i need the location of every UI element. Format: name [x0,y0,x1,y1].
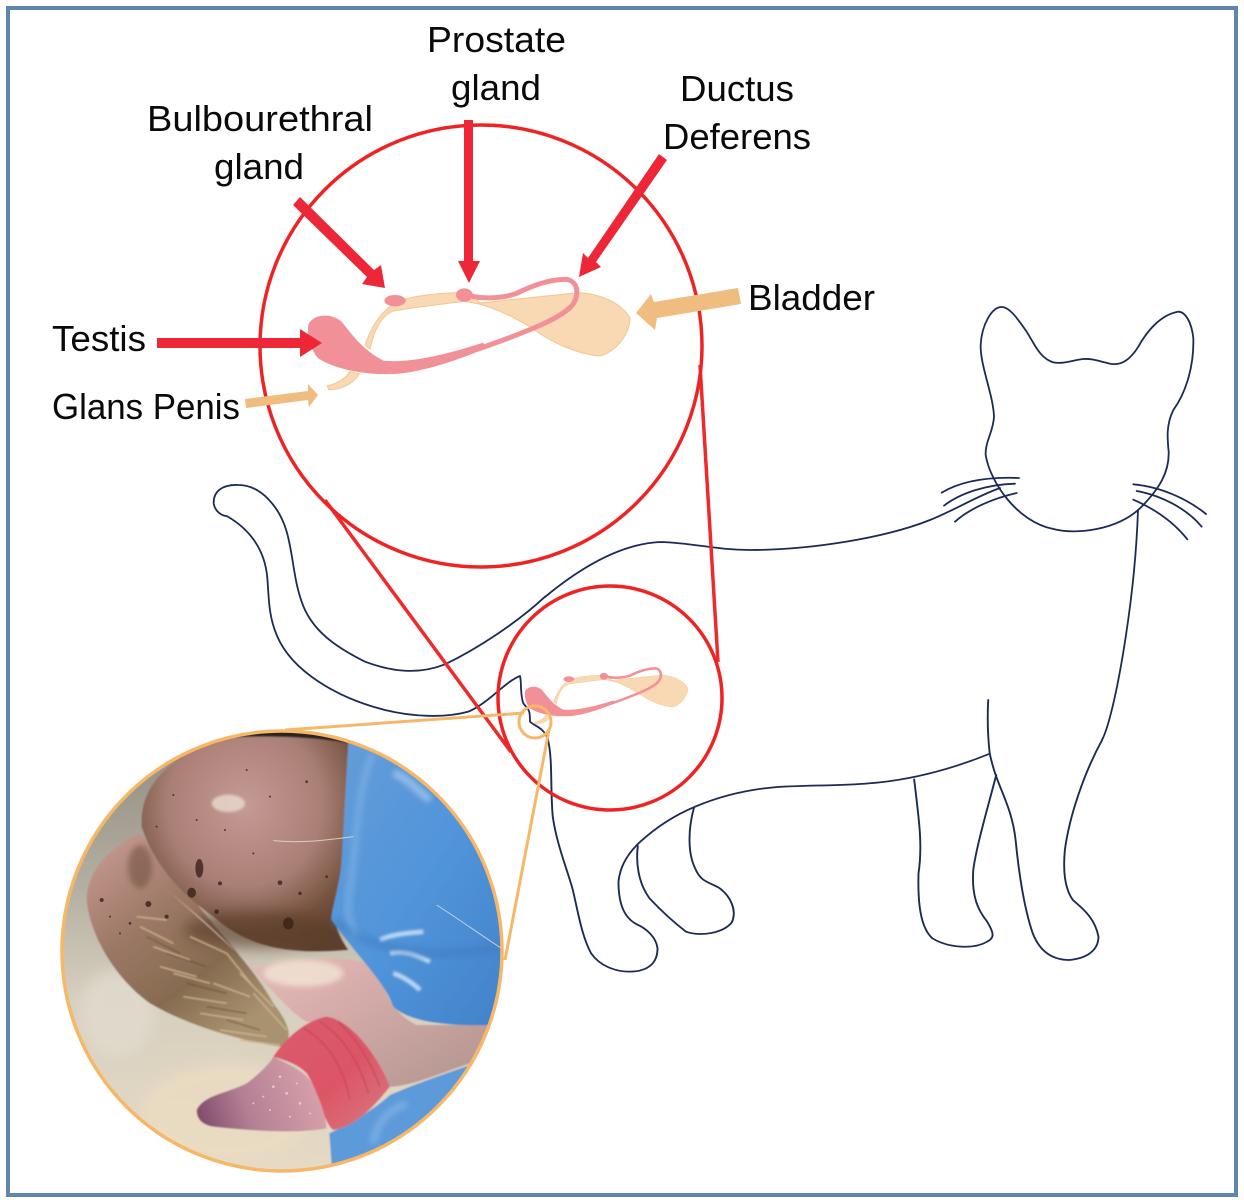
arrow: ductus deferens [579,154,667,277]
blue glove upper [330,743,500,1026]
small magnifier: anatomy [525,668,688,724]
dark skin specks [100,769,328,934]
label: Prostate gland: gland [451,67,541,108]
arrow: bulbourethral gland [293,197,385,288]
label: Bulbourethral gland: Bulbourethral [147,98,373,139]
photo callout connector [285,706,551,960]
arrow: bladder [636,288,741,330]
glans [197,1057,327,1131]
label: Testis: Testis [52,318,146,359]
skin highlight on upper lobe [212,795,245,812]
magnifier connector lines [325,365,718,752]
back [545,488,1000,597]
preputial ring [273,1017,390,1130]
tail and rump [214,485,548,740]
label: Bulbourethral gland: gland [214,146,304,187]
blue glove lower [328,1065,468,1164]
arrow: prostate gland [458,120,480,283]
arrow: testis [157,329,322,357]
near front leg [988,700,1102,960]
stray white hair [273,837,504,950]
far front leg [914,775,996,947]
label: Bladder: Bladder [748,277,875,318]
upper scrotal lobe [141,737,348,951]
neck and chest [1102,510,1138,740]
large magnifier circle [260,125,702,567]
label: Prostate gland: Prostate [427,19,566,60]
label: Ductus Deferens: Ductus [680,68,794,109]
label: Glans Penis: Glans Penis [52,386,240,427]
cat outline [214,307,1206,972]
label: Ductus Deferens: Deferens [663,116,811,157]
lower scrotal lobe [87,833,289,1047]
hind legs and belly [548,700,1102,972]
arrow: glans penis [245,384,318,408]
dark top strip [234,732,349,744]
head and whiskers [942,307,1206,539]
small magnifier circle [498,586,722,810]
tan hair [137,917,287,1045]
photo: clinical view of glans penis [53,727,523,1187]
enlarged reproductive tract [308,279,630,390]
pale midline and shaft [175,896,488,1088]
